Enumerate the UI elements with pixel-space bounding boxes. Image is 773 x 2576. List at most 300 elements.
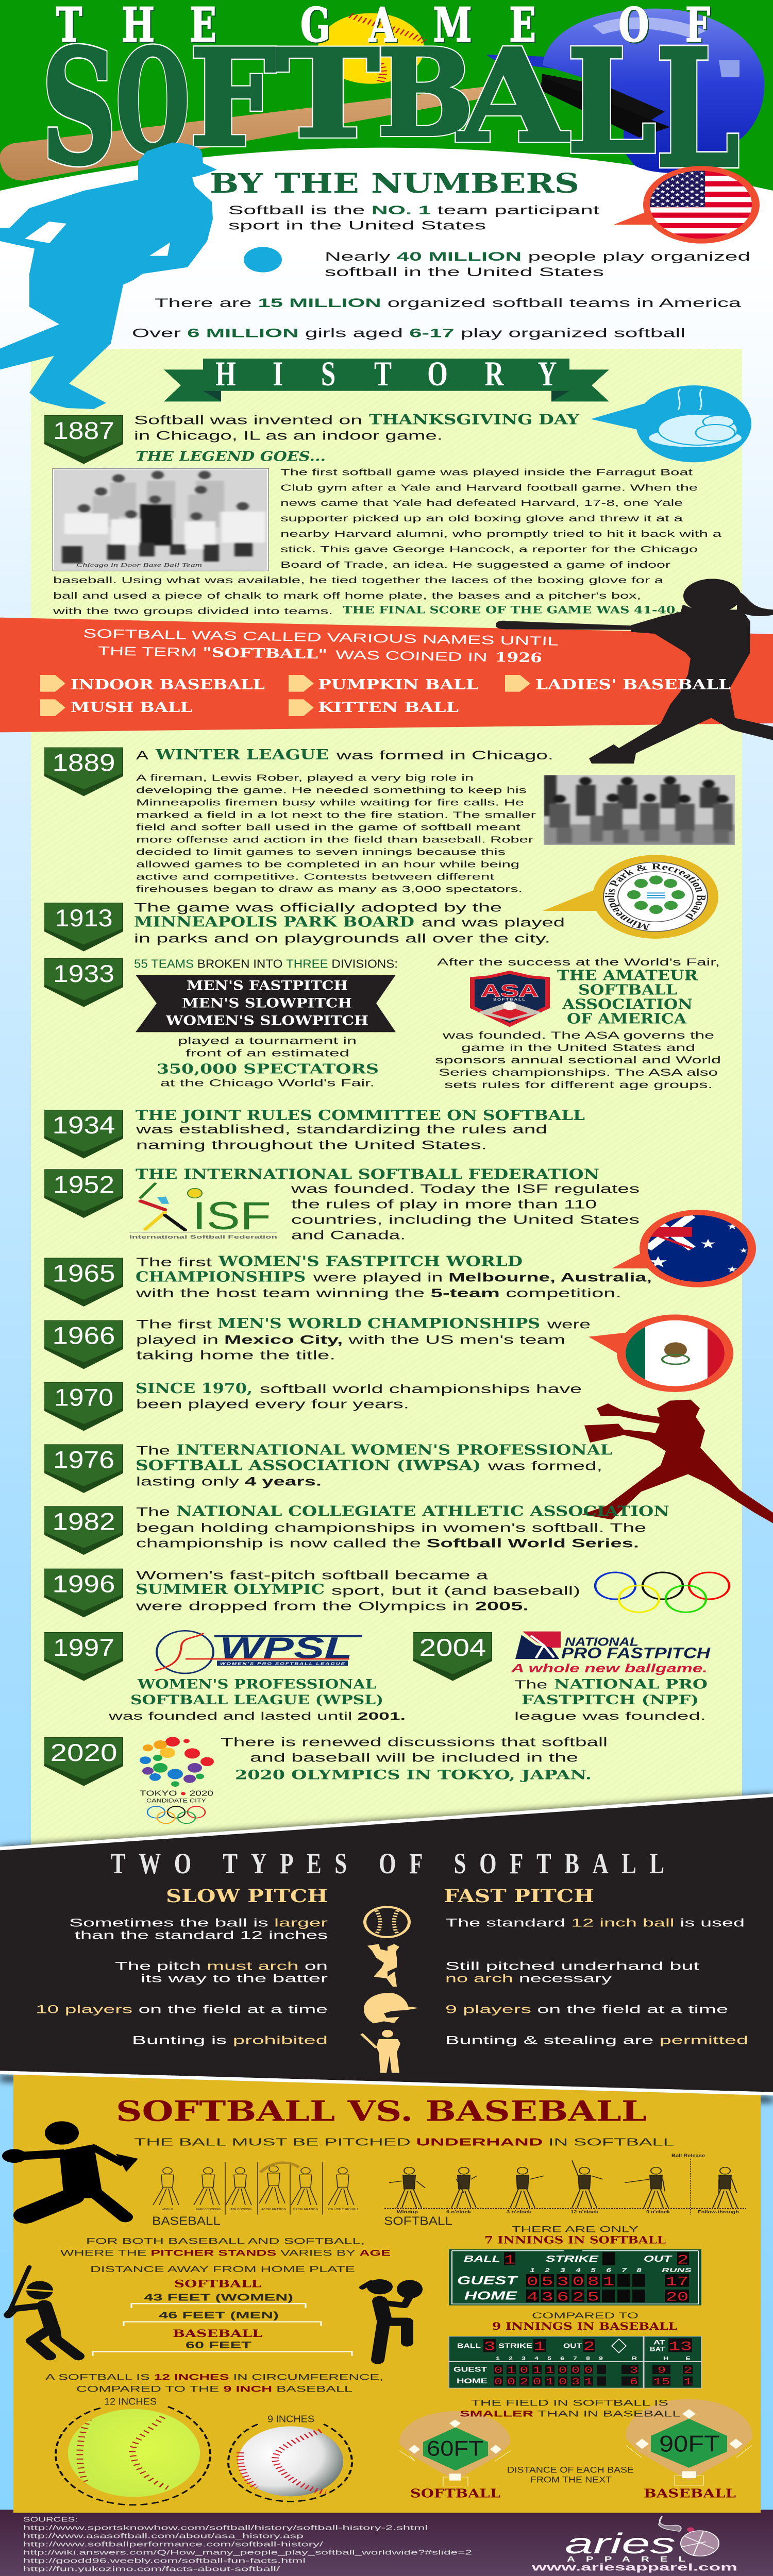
illustration: stick pitcher xyxy=(2,2121,138,2217)
icon: US flag bubble xyxy=(614,166,760,244)
scoreboard: softball: 5 xyxy=(542,2274,553,2289)
chart: softball pitch sequence: 12 o'clock xyxy=(570,2210,599,2214)
entry: 1997 xyxy=(44,1631,406,1722)
text block: Lewis Rober: Minneapolis firemen busy while waiting for fire calls. He xyxy=(136,798,524,807)
scoreboard: softball: 5 xyxy=(591,2267,596,2274)
scoreboard: softball: 6 xyxy=(557,2290,568,2304)
comparison: pitch arch: Still pitched underhand but xyxy=(445,1960,699,1972)
text block: the legend story: Club gym after a Yale and Harvard football game. When the xyxy=(280,483,698,493)
chart: softball pitch sequence: Ball Release xyxy=(671,2154,705,2158)
text block: Lewis Rober: field and softer ball used in the game of softball meant xyxy=(136,822,520,832)
header illustration: green field, softball, helmet, bat xyxy=(0,0,773,191)
scoreboard: baseball: 1 xyxy=(546,2365,554,2376)
text: seven innings: 7 INNINGS IN SOFTBALL xyxy=(484,2234,666,2246)
icon: ball xyxy=(365,1907,409,1937)
text block: Lewis Rober: allowed games to be completed in an hour while being xyxy=(136,859,519,869)
scoreboard: baseball: 0 xyxy=(584,2365,593,2376)
scoreboard: baseball: OUT xyxy=(563,2342,582,2349)
icon: softball xyxy=(318,13,424,84)
title: SOFTBALL xyxy=(42,14,740,204)
heading: two types of softball: TWO TYPES OF SOFTBALL xyxy=(111,1847,664,1879)
badge: 1976 xyxy=(44,1444,123,1493)
badge: 1889: 1889 xyxy=(52,749,115,776)
text: ISF description: was founded. Today the ISF regulates xyxy=(291,1182,640,1196)
badge: 1966 xyxy=(44,1320,123,1369)
text: invented on Thanksgiving: THANKSGIVING DAY xyxy=(369,412,580,428)
banner: history xyxy=(164,354,609,401)
badge: 2004 xyxy=(413,1632,492,1681)
shadow under dark section xyxy=(0,2074,773,2104)
stat: 6 million: Over 6 MILLION girls aged 6-17 play organized softball xyxy=(132,326,685,340)
chart: baseball pitch sequence xyxy=(152,2162,358,2228)
text block: Lewis Rober: firehouses began to draw as many as 3,000 spectators. xyxy=(136,884,523,894)
logo: National Pro Fastpitch: PRO FASTPITCH xyxy=(561,1645,711,1662)
text: sources: SOURCES: xyxy=(23,2516,78,2523)
diagram: baseball field: BASEBALL xyxy=(644,2486,736,2501)
scoreboard: softball: BALL xyxy=(464,2253,500,2264)
chart: softball pitch sequence xyxy=(384,2154,746,2228)
logo: National Pro Fastpitch xyxy=(511,1632,711,1675)
heading: fast pitch: FAST PITCH xyxy=(444,1886,594,1907)
text: WPSL: SOFTBALL LEAGUE (WPSL) xyxy=(130,1692,383,1707)
scoreboard: softball: 3 xyxy=(557,2274,568,2289)
diagram: softball field: SOFTBALL xyxy=(410,2486,500,2501)
icon: pitcher xyxy=(367,1944,399,1987)
logo: WPSL: WPSL xyxy=(220,1631,352,1665)
scoreboard: softball: 8 xyxy=(636,2267,642,2274)
text: WPSL: WOMEN'S PROFESSIONAL xyxy=(137,1676,376,1692)
section: slow and fast pitch dark panel xyxy=(0,1793,773,2092)
icon: helmet xyxy=(364,1993,419,2023)
text: NPF: NATIONAL PRO xyxy=(554,1676,708,1692)
text block: the legend story: stick. This gave George Hancock, a reporter for the Chicago xyxy=(280,544,698,554)
banner: history: HISTORY xyxy=(215,354,557,394)
text: IWPSA xyxy=(136,1442,612,1488)
text: Minneapolis Park Board: MINNEAPOLIS PARK BOARD xyxy=(134,914,414,930)
text: women's fastpitch championships: The first xyxy=(136,1256,212,1269)
scoreboard: softball: GUEST xyxy=(457,2274,518,2287)
text: sources: http://wiki.answers.com/Q/How_many_people_play_softball_worldwide?#slide=2 xyxy=(23,2549,472,2556)
text block: the legend story: nearby Harvard alumni, who promptly tried to hit it back with a xyxy=(280,529,722,539)
badge: 1933 xyxy=(44,958,123,1007)
text: winter league: A xyxy=(136,749,149,762)
chart: pitching distances xyxy=(93,2278,352,2356)
text block: the legend story: news came that Yale had defeated Harvard, 17-8, one Yale xyxy=(280,498,683,508)
text: Amateur Softball Association xyxy=(557,968,698,1027)
scoreboard: softball: 2 xyxy=(573,2290,584,2304)
logo: National Pro Fastpitch: A whole new ballgame. xyxy=(511,1662,708,1675)
illustration: blue player silhouette xyxy=(0,143,282,409)
text: NCAA: NATIONAL COLLEGIATE ATHLETIC ASSOCIATION xyxy=(176,1503,669,1520)
scoreboard: baseball: 1 xyxy=(507,2365,515,2376)
chart: pitching distances: SOFTBALL xyxy=(174,2278,261,2290)
chart: pitching distances: 43 FEET (WOMEN) xyxy=(144,2292,293,2302)
text: ball circumference xyxy=(45,2372,383,2394)
text: ISF description: and Canada. xyxy=(291,1228,406,1242)
title: SOFTBALL: A xyxy=(457,21,570,170)
text: men's world championships: MEN'S WORLD CHAMPIONSHIPS xyxy=(217,1316,540,1332)
scoreboard: baseball: 6 xyxy=(560,2355,564,2361)
text: pitcher distance intro: FOR BOTH BASEBALL AND SOFTBALL, xyxy=(86,2236,365,2246)
title: SOFTBALL: T xyxy=(276,23,379,165)
scoreboard: baseball: 9 xyxy=(658,2365,666,2376)
badge: 1952 xyxy=(44,1169,123,1218)
title: SOFTBALL: S xyxy=(42,15,116,199)
badge: 1982 xyxy=(44,1506,123,1555)
chart: baseball pitch sequence: LATE COCKING xyxy=(229,2208,251,2211)
comparison: bunting xyxy=(132,2034,748,2046)
text: tournament xyxy=(157,1036,379,1089)
badge: 1965: 1965 xyxy=(52,1259,115,1287)
logo: National Pro Fastpitch: NATIONAL xyxy=(565,1636,638,1649)
text: summer olympic: sport, but it (and baseball) xyxy=(331,1584,580,1598)
entry: 1970 xyxy=(44,1381,582,1431)
scoreboard: baseball: 0 xyxy=(572,2365,580,2376)
scoreboard: baseball: 2 xyxy=(684,2365,692,2376)
text: field size: THE FIELD IN SOFTBALL IS xyxy=(471,2398,668,2408)
text: NCAA: championship is now called the Softball World Series. xyxy=(136,1536,639,1550)
text: joint rules committee xyxy=(136,1108,585,1152)
text: ASA description: sets rules for different age groups. xyxy=(444,1080,713,1091)
text block: the legend story: Board of Trade, an idea. He suggested a game of indoor xyxy=(280,560,670,570)
text block: Lewis Rober: more offense and action in the field than baseball. Rober xyxy=(136,835,533,844)
text: NPF: The xyxy=(514,1679,547,1691)
text block: the legend story xyxy=(53,467,722,616)
scoreboard: softball: 1 xyxy=(530,2267,535,2274)
badge: 1997: 1997 xyxy=(53,1634,114,1661)
logo: ISF: International Softball Federation xyxy=(129,1234,277,1240)
ribbon: three divisions: WOMEN'S SLOWPITCH xyxy=(165,1013,368,1028)
scoreboard: baseball: 0 xyxy=(559,2365,567,2376)
scoreboard: baseball: H xyxy=(663,2355,668,2361)
chart: baseball pitch sequence: DECELERATION xyxy=(293,2208,318,2211)
logo: WPSL: WOMEN'S PRO SOFTBALL LEAGUE xyxy=(220,1662,345,1666)
text: Amateur Softball Association: SOFTBALL xyxy=(578,982,677,998)
comparison: ball size: Sometimes the ball is larger xyxy=(69,1917,328,1929)
title: SOFTBALL: T xyxy=(276,23,379,165)
logo: WPSL xyxy=(155,1631,362,1673)
text: joint rules committee: was established, standardizing the rules and xyxy=(136,1123,547,1136)
scoreboard: softball: RUNS xyxy=(662,2267,692,2274)
tag: ladies baseball: LADIES' BASEBALL xyxy=(535,676,731,693)
badge: 1913: 1913 xyxy=(55,904,112,931)
logo: ASA: ASA xyxy=(481,981,539,1001)
text: men's world championships: taking home the title. xyxy=(136,1348,335,1362)
text: sources: http://goodd96.weebly.com/softball-fun-facts.html xyxy=(23,2557,306,2565)
comparison: ball size xyxy=(69,1917,745,1941)
logo: Aries Apparel xyxy=(531,2516,737,2573)
comparison: bunting: Bunting & stealing are permitted xyxy=(445,2034,748,2046)
text: tournament: played a tournament in xyxy=(178,1036,357,1046)
tag: indoor baseball xyxy=(40,675,265,693)
text: men's world championships xyxy=(136,1316,591,1362)
text: NCAA xyxy=(136,1503,669,1550)
badge: 1913 xyxy=(44,903,123,952)
text: summer olympic: Women's fast-pitch softball became a xyxy=(136,1568,488,1582)
tag: kitten ball: KITTEN BALL xyxy=(318,699,459,716)
badge: 1970 xyxy=(44,1382,123,1431)
text: IWPSA: INTERNATIONAL WOMEN'S PROFESSIONAL xyxy=(176,1442,612,1458)
text: NCAA: The xyxy=(136,1505,170,1519)
badge: 1889 xyxy=(44,748,123,796)
text: called various names: THE TERM xyxy=(98,644,197,659)
stat: no 1 sport: Softball is the NO. 1 team participant xyxy=(228,204,600,217)
title: SOFTBALL: O xyxy=(116,19,190,185)
comparison: pitch arch: its way to the batter xyxy=(141,1972,328,1985)
badge: 1982: 1982 xyxy=(52,1507,115,1535)
icon: Minneapolis Park Board logo bubble: Minneapolis Park & Recreation Board xyxy=(605,863,706,930)
scoreboard: baseball: 3 xyxy=(630,2365,638,2376)
text block: Lewis Rober: marked a field in a lot next to the fire station. The smaller xyxy=(136,810,536,820)
text: joint rules committee: naming throughout the United States. xyxy=(136,1138,487,1152)
scoreboard: softball: 20 xyxy=(666,2290,688,2304)
text: underhand: THE BALL MUST BE PITCHED UNDERHAND IN SOFTBALL xyxy=(134,2136,674,2148)
text: tournament: at the Chicago World's Fair. xyxy=(160,1078,375,1089)
text: since 1970: been played every four years. xyxy=(136,1397,409,1411)
text block: Lewis Rober: developing the game. He needed something to keep his xyxy=(136,785,527,795)
text: 55 teams: 55 TEAMS BROKEN INTO THREE DIVISIONS: xyxy=(134,957,398,971)
scoreboard: baseball: 0 xyxy=(533,2377,541,2387)
chart: baseball pitch sequence: FOLLOW THROUGH xyxy=(328,2208,358,2211)
scoreboard: baseball: 0 xyxy=(494,2365,502,2376)
entry: 1889 xyxy=(44,747,735,894)
logo: Tokyo 2020: CANDIDATE CITY xyxy=(146,1798,206,1804)
scoreboard: baseball: 4 xyxy=(534,2355,539,2361)
icon: batter xyxy=(360,2030,400,2073)
text: WPSL xyxy=(108,1676,406,1722)
illustration: softball 12 inches xyxy=(56,2396,210,2505)
badge: 2020: 2020 xyxy=(50,1739,117,1766)
entry: 1996 xyxy=(44,1568,729,1617)
badge: 1996 xyxy=(44,1569,123,1617)
text: called various names: "SOFTBALL" xyxy=(202,645,327,662)
title: SOFTBALL: S xyxy=(42,15,116,199)
text block: the legend story: with the two groups divided into teams. xyxy=(53,606,333,616)
scoreboard: softball: 0 xyxy=(573,2274,584,2289)
scoreboard: softball: 1 xyxy=(603,2274,614,2289)
photo: firemen team xyxy=(544,775,735,845)
chart: baseball pitch sequence: BASEBALL xyxy=(152,2214,221,2228)
chart: softball pitch sequence: Follow-through xyxy=(698,2210,739,2214)
logo: ASA xyxy=(470,971,550,1027)
tag: mush ball xyxy=(40,699,192,716)
logo: ISF: ISF xyxy=(192,1194,271,1238)
title: SOFTBALL: L xyxy=(656,14,740,204)
scoreboard: baseball: AT xyxy=(653,2339,665,2346)
scoreboard: softball: STRIKE xyxy=(546,2253,599,2264)
logo: Aries Apparel: aries xyxy=(565,2528,676,2560)
chart: softball pitch sequence: Windup xyxy=(397,2210,418,2214)
scoreboard: baseball: GUEST xyxy=(453,2365,487,2373)
scoreboard: softball: 17 xyxy=(666,2274,688,2289)
icon: Minneapolis Park Board logo bubble xyxy=(543,855,718,939)
comparison: ball size: The standard 12 inch ball is used xyxy=(445,1917,745,1929)
entry: 1976 xyxy=(44,1442,612,1493)
badge: 1970: 1970 xyxy=(54,1384,113,1411)
text: nine innings: COMPARED TO xyxy=(532,2311,638,2320)
scoreboard: softball: OUT xyxy=(644,2253,673,2264)
scoreboard: baseball: HOME xyxy=(457,2377,488,2385)
text: seven innings xyxy=(484,2225,666,2246)
scoreboard: softball: 4 xyxy=(527,2290,538,2304)
chart: baseball pitch sequence: EARLY COCKING xyxy=(196,2208,221,2211)
text: since 1970: SINCE 1970, xyxy=(136,1381,253,1397)
entry: 1887 xyxy=(44,412,722,616)
text: Amateur Softball Association: THE AMATEUR xyxy=(557,968,698,984)
icon: turkey bubble xyxy=(591,385,751,462)
entry: 1933 xyxy=(44,957,721,1091)
scoreboard: baseball: 0 xyxy=(520,2365,528,2376)
text block: Lewis Rober: decided to limit games to seven innings because this xyxy=(136,847,506,857)
text: since 1970: softball world championships have xyxy=(260,1382,582,1396)
comparison: pitch arch: The pitch must arch on xyxy=(115,1960,328,1972)
text: ASA description xyxy=(435,1030,721,1091)
stat: 15 million: There are 15 MILLION organized softball teams in America xyxy=(155,296,741,310)
text: since 1970 xyxy=(136,1381,582,1411)
footer band xyxy=(0,2510,773,2576)
scoreboard: softball: 4 xyxy=(575,2267,581,2274)
badge: 2004: 2004 xyxy=(419,1634,486,1661)
scoreboard: baseball: 0 xyxy=(507,2377,515,2387)
text: ISF description: the rules of play in more than 110 xyxy=(291,1197,597,1211)
text: winter league: was formed in Chicago. xyxy=(336,749,553,762)
title: SOFTBALL: F xyxy=(190,21,276,176)
text: Minneapolis Park Board: in parks and on playgrounds all over the city. xyxy=(134,931,550,945)
comparison: players: 9 players on the field at a time xyxy=(445,2003,728,2015)
text: sources: http://www.softballperformance.com/softball-history/ xyxy=(23,2540,323,2548)
text: summer olympic xyxy=(136,1568,580,1613)
text: summer olympic: were dropped from the Olympics in 2005. xyxy=(136,1599,529,1613)
text: women's fastpitch championships: WOMEN'S FASTPITCH WORLD xyxy=(218,1253,523,1269)
text: joint rules committee: THE JOINT RULES COMMITTEE ON SOFTBALL xyxy=(136,1108,585,1124)
text: invented on Thanksgiving: Softball was invented on xyxy=(134,413,362,427)
text: nine innings: 9 INNINGS IN BASEBALL xyxy=(492,2320,677,2332)
ribbon: three divisions: MEN'S FASTPITCH xyxy=(187,978,348,993)
heading: by the numbers: BY THE NUMBERS xyxy=(210,167,579,199)
panel: softball vs baseball xyxy=(0,2071,773,2513)
scoreboard: baseball: R xyxy=(632,2355,637,2361)
scoreboard: softball: 1 xyxy=(504,2252,515,2267)
scoreboard: baseball: 9 xyxy=(599,2355,603,2361)
text: Tokyo olympics: There is renewed discussions that softball xyxy=(221,1735,608,1749)
scoreboard: baseball: 3 xyxy=(572,2377,580,2387)
text: women's fastpitch championships: were played in Melbourne, Australia, xyxy=(313,1270,652,1284)
scoreboard: softball: 8 xyxy=(587,2274,599,2289)
comparison: players xyxy=(36,2003,728,2015)
stat: no 1 sport xyxy=(228,204,600,232)
scoreboard: baseball: 1 xyxy=(546,2377,554,2387)
scoreboard: softball: 5 xyxy=(587,2290,599,2304)
chart: softball pitch sequence: 3 o'clock xyxy=(507,2210,532,2214)
text: men's world championships: played in Mexico City, with the US men's team xyxy=(136,1333,565,1347)
text: ISF description: countries, including the United States xyxy=(291,1213,640,1227)
illustration: baseball 9 inches xyxy=(228,2414,352,2501)
chart: pitching distances: 60 FEET xyxy=(186,2340,251,2350)
scoreboard: softball: 2 xyxy=(677,2252,688,2267)
title: SOFTBALL: F xyxy=(190,21,276,176)
text: winter league: WINTER LEAGUE xyxy=(155,747,329,763)
panel: history background xyxy=(31,349,742,1854)
tag: indoor baseball: INDOOR BASEBALL xyxy=(71,676,265,693)
text block: the legend story: baseball. Using what was available, he tied together the laces of the boxing glove for a xyxy=(53,575,664,585)
shadow above dark section xyxy=(0,1792,773,1853)
heading: softball vs baseball: SOFTBALL VS. BASEBALL xyxy=(116,2095,647,2128)
scoreboard: baseball: 1 xyxy=(534,2339,545,2354)
text: pitcher distance intro: DISTANCE AWAY FROM HOME PLATE xyxy=(90,2264,355,2274)
scoreboard: baseball: 1 xyxy=(533,2365,541,2376)
text: NPF xyxy=(514,1676,708,1722)
text: summer olympic: SUMMER OLYMPIC xyxy=(136,1582,325,1598)
stat: 40 million xyxy=(325,250,750,279)
scoreboard: baseball: 8 xyxy=(586,2355,590,2361)
scoreboard: baseball: 3 xyxy=(484,2339,495,2354)
heading: slow pitch: SLOW PITCH xyxy=(166,1886,328,1907)
scoreboard: softball: 6 xyxy=(606,2267,612,2274)
diagram: softball field xyxy=(399,2411,511,2501)
logo: Tokyo 2020 xyxy=(140,1737,214,1823)
badge: 1933: 1933 xyxy=(53,960,114,987)
scoreboard: baseball: 1 xyxy=(584,2377,593,2387)
text: called various names: WAS COINED IN xyxy=(335,648,488,664)
title: SOFTBALL: L xyxy=(656,14,740,204)
badge: 2020 xyxy=(44,1737,123,1786)
text: WPSL: was founded and lasted until 2001. xyxy=(108,1709,406,1722)
text: field size: SMALLER THAN IN BASEBALL xyxy=(460,2409,681,2419)
text: Minneapolis Park Board: and was played xyxy=(422,916,565,929)
entry: 2004 xyxy=(413,1632,711,1722)
text: NPF: league was founded. xyxy=(514,1709,706,1722)
chart: baseball pitch sequence: WIND UP xyxy=(162,2208,173,2211)
badge: 1965 xyxy=(44,1258,123,1307)
comparison: pitch arch: no arch necessary xyxy=(445,1972,612,1985)
text: women's fastpitch championships: CHAMPIONSHIPS xyxy=(136,1269,306,1285)
chart: softball pitch sequence: 9 o'clock xyxy=(646,2210,670,2214)
text: pitcher distance intro xyxy=(60,2236,391,2274)
chart: softball pitch sequence: 6 o'clock xyxy=(446,2210,472,2214)
ribbon: three divisions xyxy=(136,975,396,1032)
tag: pumpkin ball xyxy=(289,675,478,693)
icon: Australia flag bubble xyxy=(612,1210,756,1287)
badge: 1887: 1887 xyxy=(53,417,114,444)
text: IWPSA: SOFTBALL ASSOCIATION (IWPSA) xyxy=(136,1458,481,1473)
chart: baseball pitch sequence: ACCELERATION xyxy=(261,2208,286,2211)
text block: the legend story: supporter picked up an old boxing glove and threw it at a xyxy=(280,513,683,523)
scoreboard: baseball: 5 xyxy=(547,2355,551,2361)
text: sources: http://fun.yukozimo.com/facts-about-softball/ xyxy=(23,2565,280,2573)
text: Amateur Softball Association: OF AMERICA xyxy=(567,1011,687,1027)
diagram: baseball field xyxy=(626,2399,752,2501)
scoreboard: baseball: 2 xyxy=(520,2377,528,2387)
text: after world's fair: After the success at the World's Fair, xyxy=(437,957,720,968)
text: sources: http://www.sportsknowhow.com/softball/history/softball-history-2.shtml xyxy=(23,2524,428,2532)
text: Minneapolis Park Board xyxy=(134,901,565,945)
section: various names xyxy=(40,626,731,716)
scoreboard: baseball: BAT xyxy=(650,2346,665,2352)
title: SOFTBALL: L xyxy=(567,20,656,185)
badge: 1934 xyxy=(44,1110,123,1159)
title: SOFTBALL: A xyxy=(457,21,570,170)
entry: 1934 xyxy=(44,1108,585,1159)
text: tournament: front of an estimated xyxy=(186,1048,349,1059)
title: SOFTBALL: B xyxy=(377,23,474,163)
logo: ISF xyxy=(129,1183,277,1240)
entry: 1966 xyxy=(44,1316,591,1369)
text: ball circumference: COMPARED TO THE 9 INCH BASEBALL xyxy=(76,2384,352,2394)
icon: Mexico flag bubble xyxy=(589,1314,733,1392)
text: called various names xyxy=(82,626,559,666)
illustration: softball 12 inches: 12 INCHES xyxy=(104,2396,157,2406)
text block: Lewis Rober xyxy=(136,773,536,894)
